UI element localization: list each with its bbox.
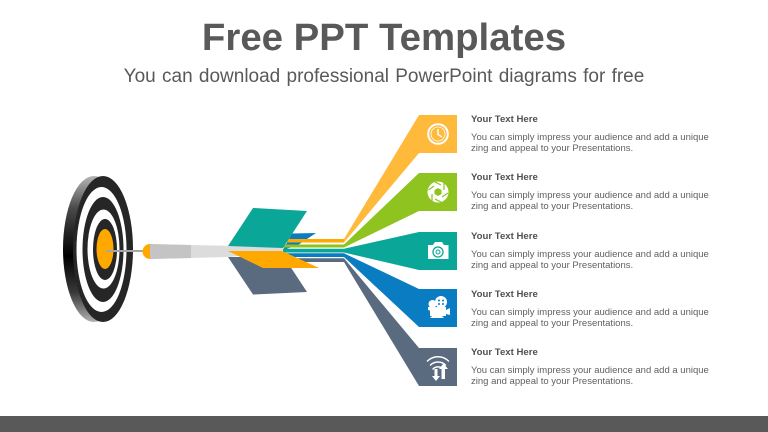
- icon: aperture: [428, 182, 448, 202]
- text block 4: [471, 289, 709, 329]
- ribbon: slate: [283, 258, 457, 386]
- text block 5: You can simply impress your audience and add a unique: [471, 364, 709, 376]
- dart tip: [143, 244, 150, 259]
- ribbon: teal: [283, 232, 457, 270]
- text block 1: Your Text Here: [471, 114, 538, 125]
- feather: slate: [228, 257, 307, 294]
- text block 4: zing and appeal to your Presentations.: [471, 318, 633, 329]
- icon: camera: [428, 242, 448, 259]
- dart shaft: [150, 244, 283, 259]
- footer bar: [0, 416, 768, 432]
- text block 5: [471, 347, 709, 387]
- text block 3: zing and appeal to your Presentations.: [471, 260, 633, 271]
- text block 4: You can simply impress your audience and add a unique: [471, 306, 709, 318]
- feather: orange: [228, 251, 319, 268]
- dart needle: [106, 250, 146, 252]
- text block 3: [471, 231, 709, 271]
- dart: [106, 208, 319, 268]
- feather: blue: [283, 233, 316, 250]
- text block 1: zing and appeal to your Presentations.: [471, 143, 633, 154]
- dart grip: [150, 244, 191, 259]
- icon: wifi arrows: [428, 357, 448, 381]
- target board: [63, 176, 133, 322]
- icon: clock: [428, 124, 448, 144]
- ribbon: blue: [283, 253, 457, 327]
- text block 2: zing and appeal to your Presentations.: [471, 201, 633, 212]
- text block 5: Your Text Here: [471, 347, 538, 358]
- text block 3: You can simply impress your audience and add a unique: [471, 248, 709, 260]
- text block 2: You can simply impress your audience and add a unique: [471, 190, 709, 200]
- text block 1: [471, 114, 709, 154]
- icon: film camera: [428, 296, 450, 318]
- text block 4: Your Text Here: [471, 289, 538, 300]
- feather: teal: [228, 208, 307, 248]
- ribbon: orange: [287, 115, 457, 242]
- text block 5: zing and appeal to your Presentations.: [471, 376, 633, 387]
- text block 1: You can simply impress your audience and add a unique: [471, 132, 709, 142]
- text block 3: Your Text Here: [471, 231, 538, 242]
- text block 2: Your Text Here: [471, 172, 538, 183]
- ribbon: green: [283, 173, 457, 248]
- subtitle: You can download professional PowerPoint diagrams for free: [124, 66, 644, 87]
- title: Free PPT Templates: [202, 16, 566, 59]
- text block 2: [471, 172, 709, 212]
